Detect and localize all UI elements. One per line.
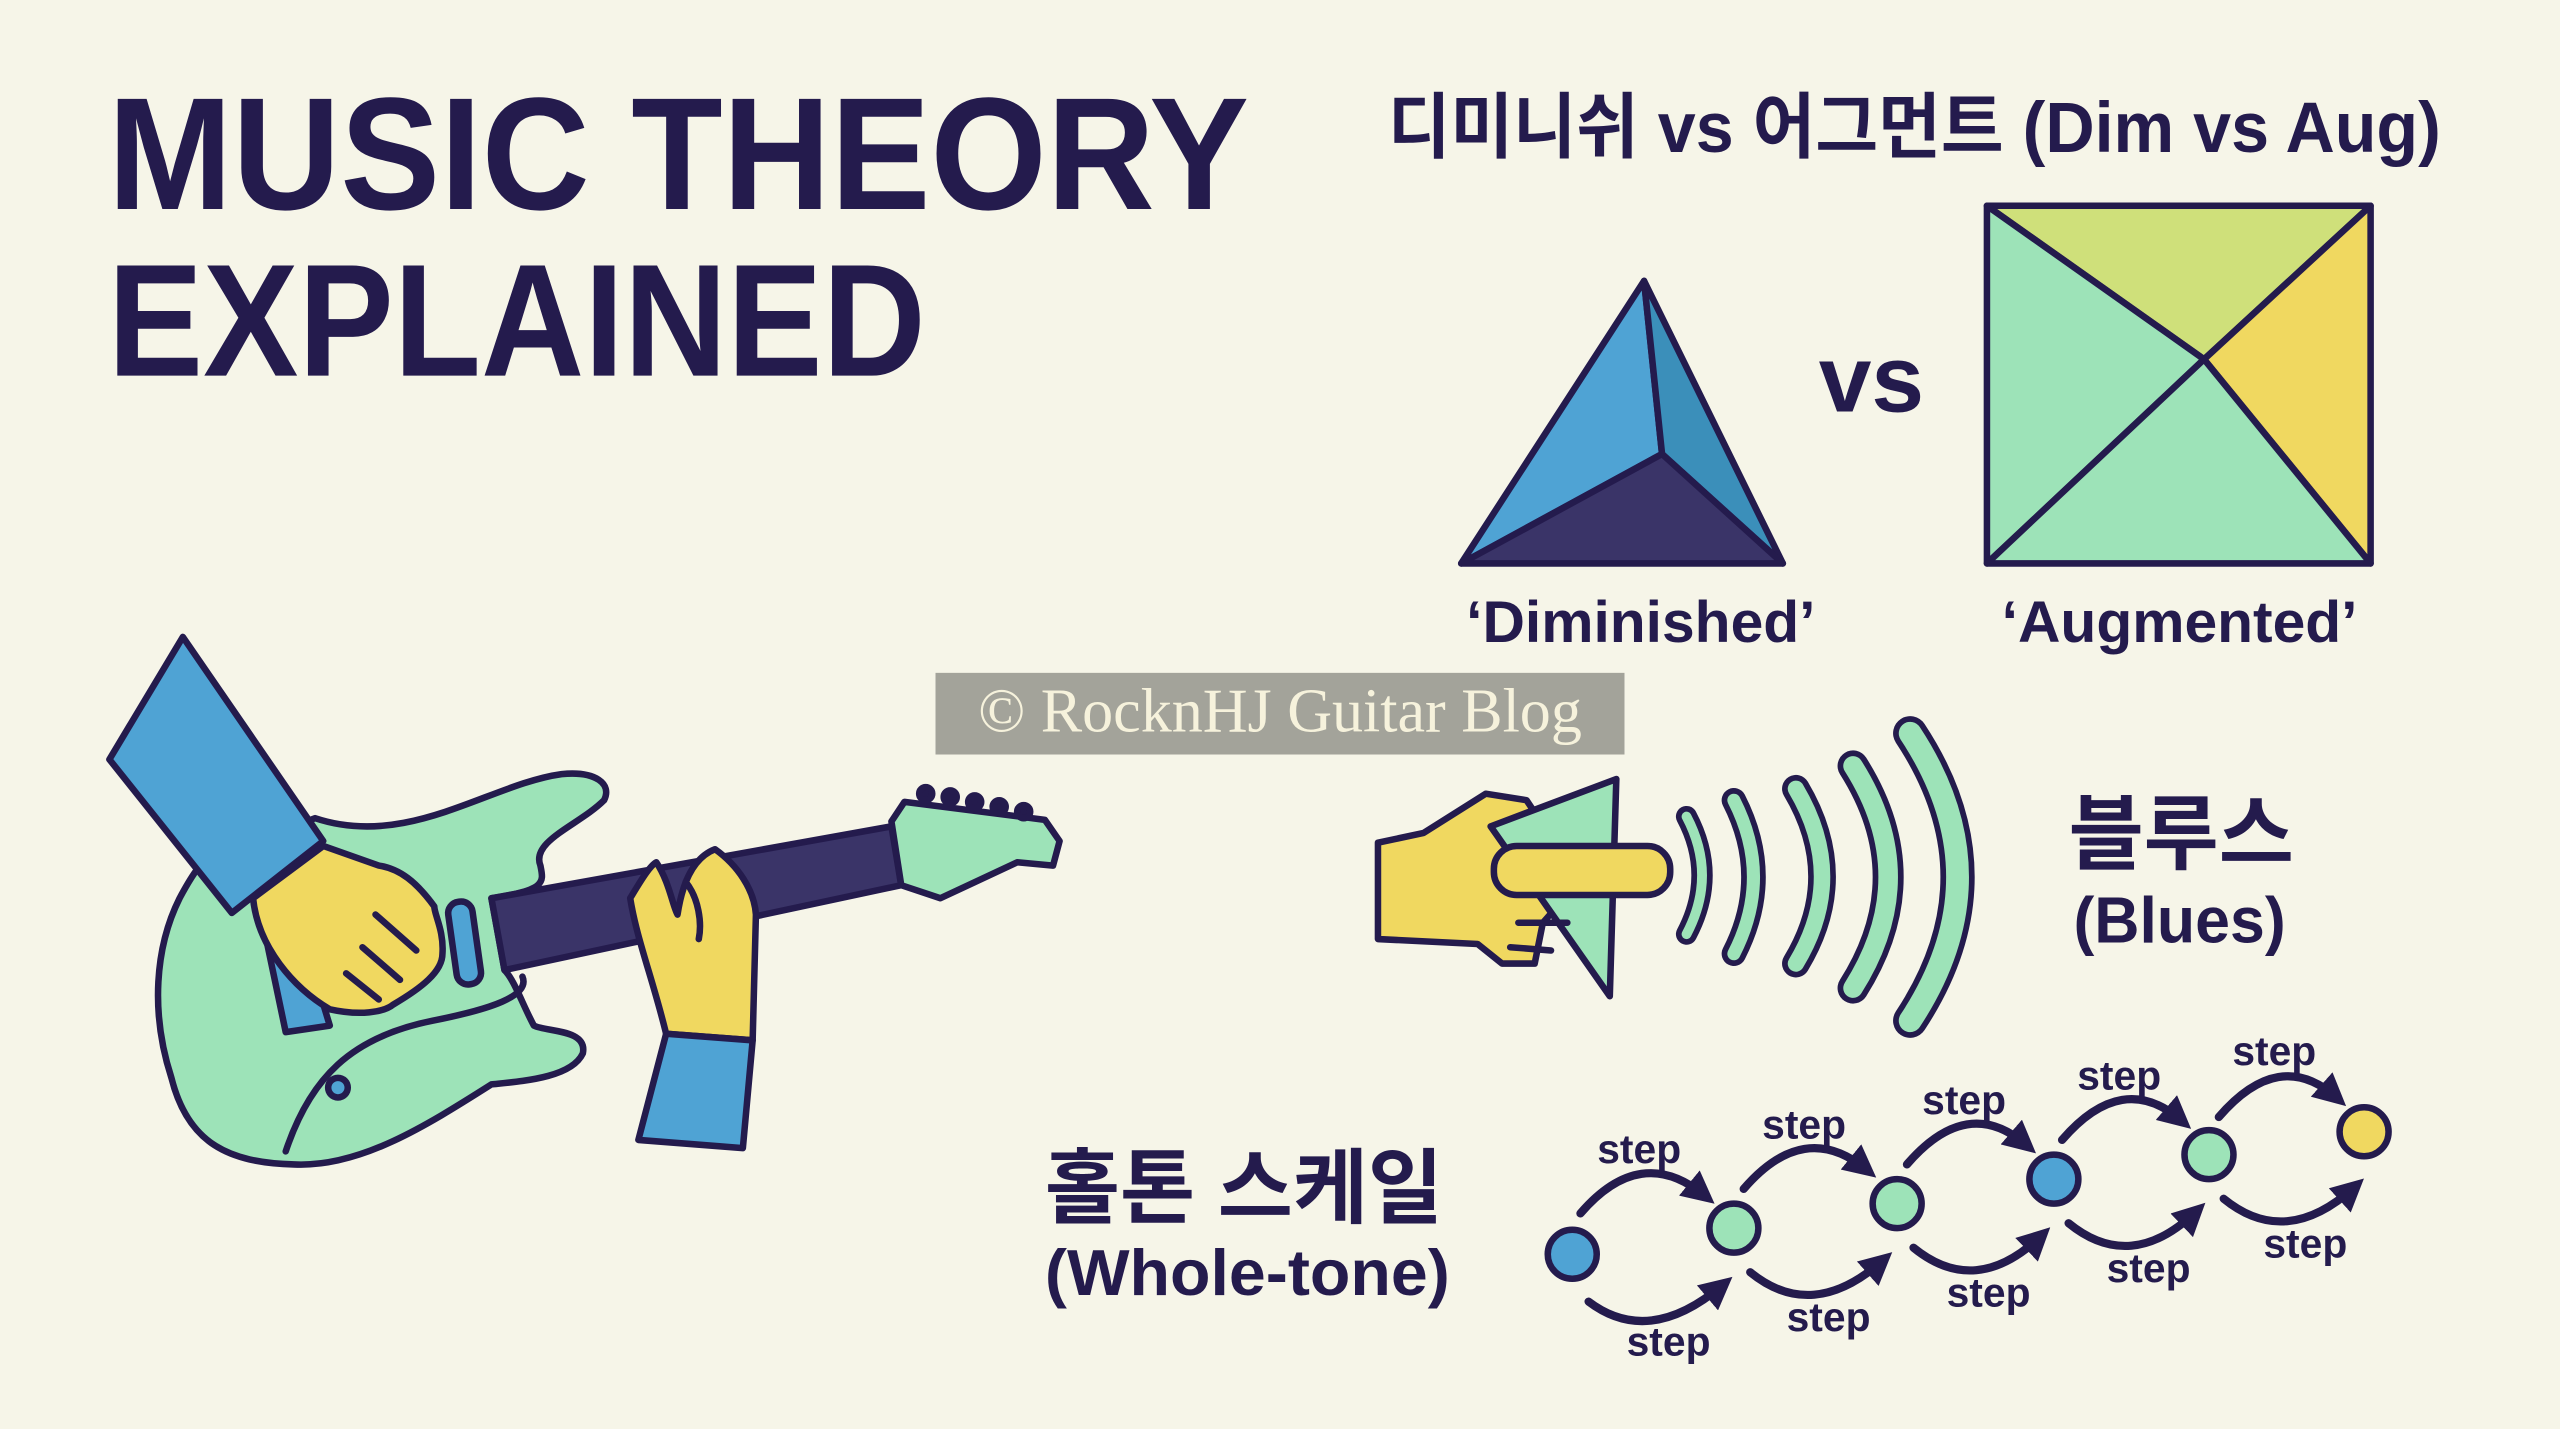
icon: augmented square: [1987, 206, 2371, 563]
diagram: whole-tone steps: step: [1947, 1270, 2031, 1316]
icon: blues hand with sound waves: [1378, 733, 1958, 1021]
diagram: whole-tone steps: step: [2077, 1052, 2161, 1098]
illustration: guitar with hands: [109, 637, 1060, 1165]
heading: dim vs aug: 디미니쉬 vs 어그먼트 (Dim vs Aug): [1388, 88, 2441, 168]
label: blues: (Blues): [2073, 883, 2286, 956]
title: EXPLAINED: [108, 231, 926, 410]
vs label: vs: [1819, 327, 1924, 433]
watermark: © RocknHJ Guitar Blog: [978, 678, 1582, 746]
label: whole-tone: (Whole-tone): [1045, 1236, 1450, 1309]
diagram: whole-tone steps: step: [2107, 1245, 2191, 1291]
label: blues: 블루스: [2069, 789, 2294, 880]
diagram: whole-tone steps: step: [1787, 1294, 1871, 1340]
diagram: whole-tone steps: step: [1922, 1077, 2006, 1123]
diagram: whole-tone steps: step: [2232, 1028, 2316, 1074]
label: augmented: ‘Augmented’: [2002, 590, 2358, 655]
label: blues: [2069, 789, 2294, 956]
diagram: whole-tone steps: [1548, 1028, 2389, 1365]
diagram: whole-tone steps: step: [1597, 1126, 1681, 1172]
title: [108, 64, 1249, 410]
label: diminished: ‘Diminished’: [1466, 590, 1815, 655]
diagram: whole-tone steps: step: [2263, 1221, 2347, 1267]
icon: diminished triangle: [1461, 281, 1783, 563]
diagram: whole-tone steps: step: [1627, 1319, 1711, 1365]
diagram: whole-tone steps: step: [1762, 1101, 1846, 1147]
label: whole-tone: 홀톤 스케일: [1045, 1144, 1443, 1235]
title: MUSIC THEORY: [108, 64, 1249, 243]
label: whole-tone: [1045, 1144, 1450, 1309]
